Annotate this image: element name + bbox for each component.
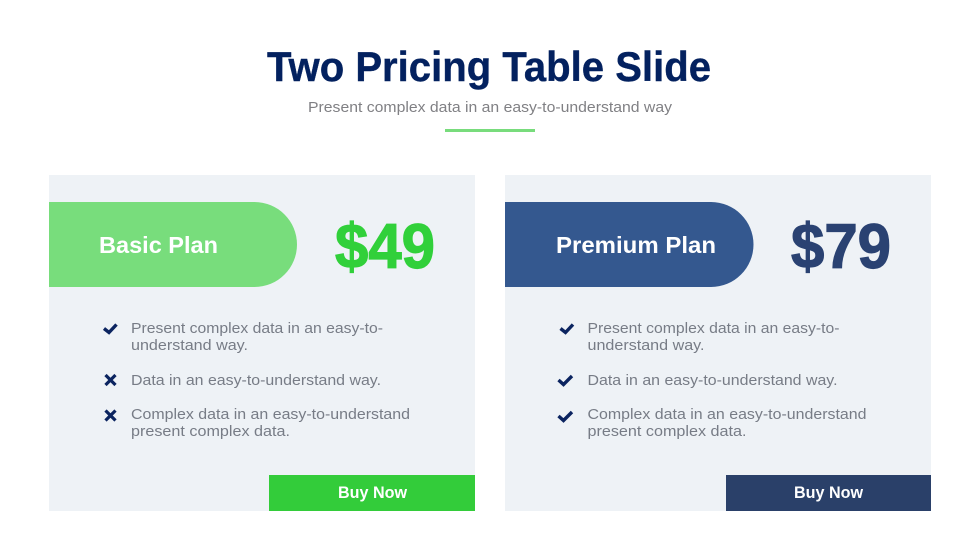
plan banner [49, 202, 297, 287]
panel: basic plan [49, 175, 475, 511]
feature list [558, 321, 866, 440]
feature text: present complex data. [588, 424, 746, 440]
icon: check [104, 324, 116, 332]
plan banner: Premium Plan [556, 232, 716, 258]
icon: check [558, 412, 572, 420]
buy button: Buy Now [338, 484, 407, 502]
plan banner [505, 202, 754, 287]
panel: premium plan [505, 175, 931, 511]
icon: check [558, 376, 572, 384]
subtitle: Present complex data in an easy-to-understand way [308, 99, 673, 116]
feature text [588, 407, 866, 440]
buy button: Buy Now [794, 484, 863, 502]
feature text: Data in an easy-to-understand way. [588, 373, 838, 389]
buy button [269, 475, 475, 511]
buy button [726, 475, 931, 511]
feature text [588, 321, 840, 354]
icon: cross [106, 375, 116, 385]
feature text [131, 407, 410, 440]
feature text: present complex data. [131, 424, 290, 440]
feature text: Data in an easy-to-understand way. [131, 373, 381, 389]
feature text: Present complex data in an easy-to- [588, 321, 840, 337]
title: Two Pricing Table Slide [267, 43, 711, 90]
icon: check [560, 324, 573, 332]
panel background [505, 175, 931, 511]
feature text: understand way. [131, 338, 248, 354]
icon: cross [106, 410, 116, 420]
feature list [104, 321, 410, 440]
price: $49 [335, 212, 435, 282]
feature text: Complex data in an easy-to-understand [131, 407, 410, 423]
feature text [131, 321, 383, 354]
feature text: understand way. [588, 338, 704, 354]
feature text: Complex data in an easy-to-understand [588, 407, 866, 423]
title underline [445, 129, 535, 132]
panel background [49, 175, 475, 511]
feature text: Present complex data in an easy-to- [131, 321, 383, 337]
price: $79 [791, 212, 891, 282]
plan banner: Basic Plan [99, 232, 218, 258]
